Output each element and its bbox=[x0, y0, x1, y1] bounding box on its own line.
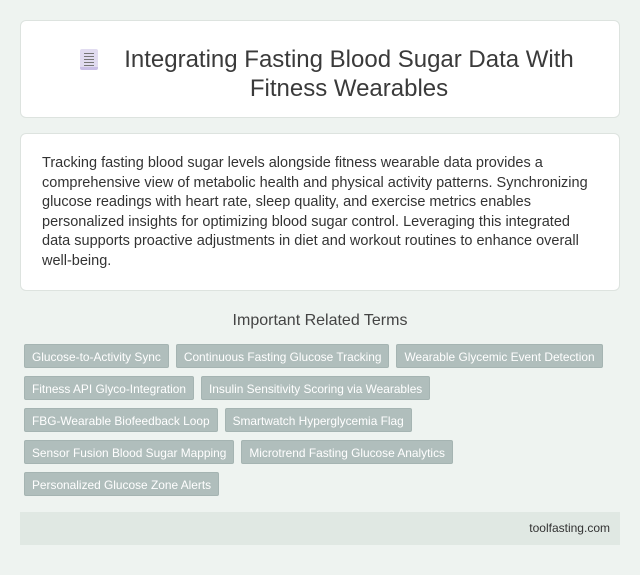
section heading: Important Related Terms bbox=[233, 312, 407, 329]
footer: toolfasting.com bbox=[529, 521, 610, 535]
tags: Glucose-to-Activity Sync bbox=[32, 350, 161, 364]
tags: Smartwatch Hyperglycemia Flag bbox=[233, 414, 404, 428]
tags: Microtrend Fasting Glucose Analytics bbox=[249, 446, 445, 460]
icon: receipt bbox=[80, 49, 98, 70]
tags: Personalized Glucose Zone Alerts bbox=[32, 478, 211, 492]
tags bbox=[24, 344, 603, 496]
title: Integrating Fasting Blood Sugar Data With Fitness Wearables bbox=[124, 46, 574, 102]
header card bbox=[20, 20, 620, 118]
tags: Insulin Sensitivity Scoring via Wearables bbox=[209, 382, 422, 396]
tags: Sensor Fusion Blood Sugar Mapping bbox=[32, 446, 226, 460]
footer bbox=[20, 512, 620, 545]
tags: FBG-Wearable Biofeedback Loop bbox=[32, 414, 210, 428]
description text: Tracking fasting blood sugar levels alongside fitness wearable data provides a comprehensive view of metabolic health and physical activity patterns. Synchronizing glucose readings with heart rate, sleep quality, and exercise metrics enables personalized insights for optimizing blood sugar control. Leveraging this integrated data supports proactive adjustments in diet and workout routines to enhance overall well-being. bbox=[42, 155, 588, 268]
tags: Wearable Glycemic Event Detection bbox=[404, 350, 595, 364]
tags: Continuous Fasting Glucose Tracking bbox=[184, 350, 381, 364]
tags: Fitness API Glyco-Integration bbox=[32, 382, 186, 396]
description card bbox=[20, 133, 620, 291]
